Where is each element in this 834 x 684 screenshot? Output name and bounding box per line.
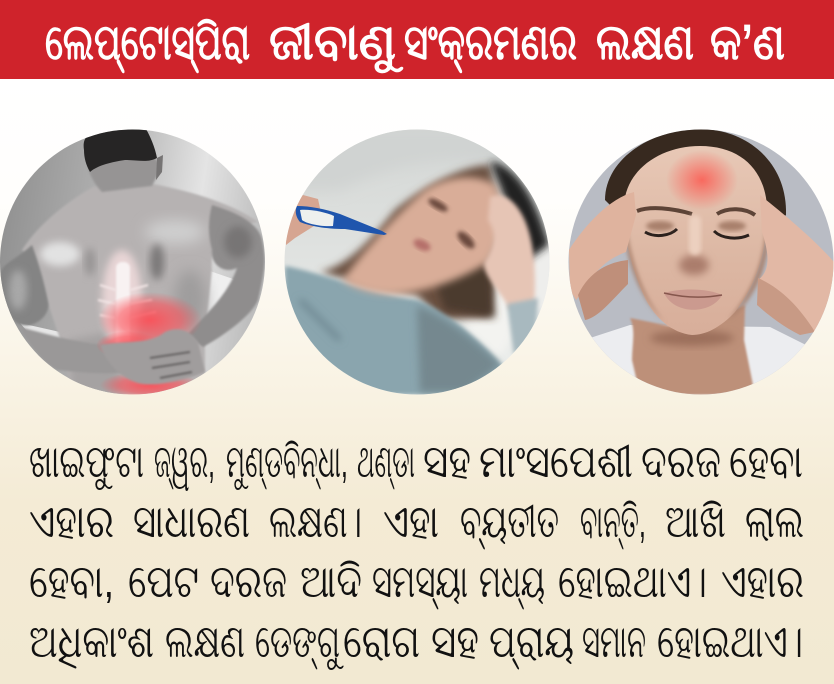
- lips: [664, 289, 722, 310]
- neck: [630, 305, 755, 395]
- line 2: ବାନ୍ତି,: [580, 495, 646, 550]
- photo: woman with fever and thermometer: [284, 129, 552, 395]
- muscle shading: [40, 242, 80, 266]
- line 1: ମାଂସପେଶୀ: [479, 435, 633, 487]
- line 1: ଖାଇଫୁଟା: [29, 435, 144, 490]
- photo: man with back pain: [0, 129, 265, 399]
- line 1: ଜ୍ୱର,: [154, 435, 215, 490]
- line 3: ମଧ୍ୟ: [479, 555, 545, 610]
- right hand: [758, 195, 834, 333]
- body text: [29, 435, 804, 670]
- line 1: ମୁଣ୍ଡବିନ୍ଧା,: [226, 435, 348, 490]
- line 3: ଆଦି: [300, 555, 362, 607]
- right arm: [187, 205, 264, 347]
- title text: ସଂକ୍ରମଣର: [404, 14, 577, 74]
- thermometer hand: [286, 195, 320, 245]
- line 4: ଲକ୍ଷଣ: [165, 615, 245, 667]
- line 2: ଲାଲ: [745, 495, 804, 547]
- spine highlight: [102, 250, 142, 350]
- eyes: [645, 229, 677, 236]
- neck: [88, 158, 157, 192]
- line 4: ଅଧିକାଂଶ: [29, 615, 154, 669]
- line 4: ପ୍ରାୟ: [489, 615, 574, 670]
- line 2: ସାଧାରଣ: [133, 495, 250, 547]
- left hand: [569, 192, 636, 300]
- line 3: ହୋଇଥାଏ।: [558, 555, 707, 607]
- line 3: ଦରଜ: [210, 555, 287, 607]
- hand: [100, 329, 205, 384]
- line 4: ସହ: [431, 615, 479, 667]
- line 3: [29, 555, 804, 610]
- line 1: ଦରଜ: [641, 435, 721, 487]
- line 2: ଏହା: [383, 495, 439, 547]
- chin shadow: [650, 330, 734, 346]
- line 4: [29, 615, 803, 670]
- title banner: [0, 0, 834, 79]
- pillow right: [468, 293, 509, 352]
- line 2: ଲକ୍ଷଣ।: [269, 495, 362, 547]
- torso: [22, 182, 258, 394]
- thermometer: [296, 206, 387, 235]
- face: [624, 146, 767, 335]
- blouse: [284, 266, 505, 395]
- eyebrows: [637, 208, 692, 214]
- ear: [156, 155, 163, 180]
- line 4: ସମାନ: [582, 615, 646, 667]
- nose: [679, 255, 709, 275]
- hair: [84, 129, 157, 172]
- light gaps around the body: [208, 272, 233, 312]
- line 4: ଡେଙ୍ଗୁ: [255, 615, 344, 670]
- line 3: ଏହାର: [721, 555, 804, 607]
- pain glow: [100, 294, 199, 340]
- hand on head: [484, 195, 535, 310]
- hair: [320, 165, 500, 320]
- line 3: ସମସ୍ୟା: [372, 555, 468, 610]
- left arm: [0, 245, 48, 325]
- line 2: ବ୍ୟତୀତ: [460, 495, 559, 550]
- line 1: ସହ: [423, 435, 471, 487]
- title text: ଲକ୍ଷଣ: [596, 14, 694, 70]
- sleeve: [507, 298, 538, 355]
- left forearm behind back: [24, 326, 118, 372]
- face and neck: [343, 177, 501, 294]
- hair: [605, 129, 786, 225]
- line 3: ପେଟ: [128, 555, 199, 607]
- title text: ଜୀବାଣୁ: [269, 14, 404, 74]
- white top: [590, 325, 806, 395]
- line 4: ରୋଗ: [343, 615, 420, 667]
- title text: କ’ଣ: [710, 14, 785, 70]
- line 2: [29, 495, 804, 550]
- line 2: ଆଖି: [665, 495, 726, 547]
- line 1: ହେବା: [729, 435, 803, 487]
- title text: [45, 14, 785, 74]
- line 1: ଥଣ୍ଡା: [357, 435, 415, 490]
- line 2: ଏହାର: [29, 495, 114, 547]
- photo: woman with headache: [568, 129, 834, 395]
- title text: ଲେପ୍ଟୋସ୍ପିରା: [45, 14, 250, 74]
- line 3: ହେବା,: [29, 555, 114, 607]
- line 1: [29, 435, 803, 490]
